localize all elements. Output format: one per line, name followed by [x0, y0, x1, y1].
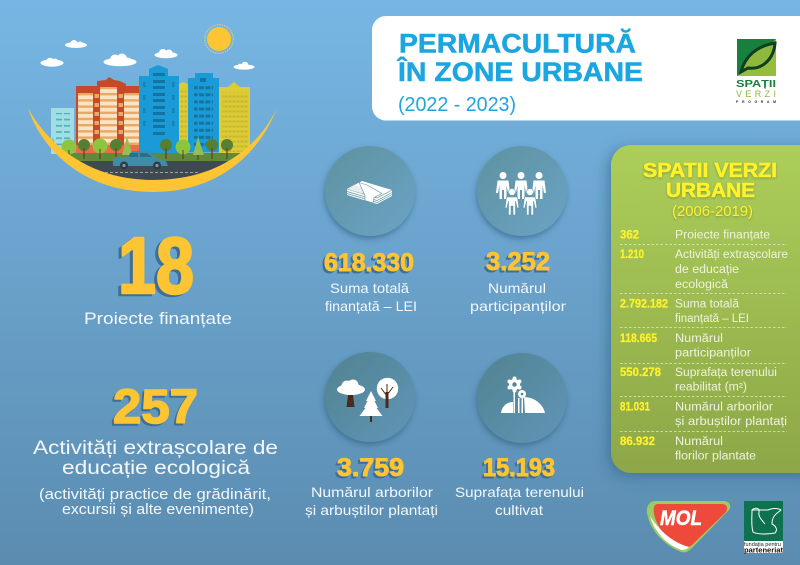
icon: trees	[50, 137, 233, 160]
row: projects: 362	[620, 230, 639, 242]
panel heading: URBANE	[666, 180, 755, 202]
stat: participants: participanților	[470, 298, 566, 314]
stat: total funding: finanțată – LEI	[325, 298, 417, 314]
logo: Spații Verzi: SPAȚII	[736, 78, 776, 90]
stat: trees planted: Numărul arborilor	[311, 484, 433, 500]
stat: cultivated area: Suprafața terenului	[455, 484, 584, 500]
row: activities: ecologică	[675, 279, 729, 291]
row: rehabilitated area	[620, 367, 777, 394]
icon: money	[347, 181, 392, 204]
logo: Fundația pentru Parteneriat: fundația pentru	[744, 542, 781, 548]
stat: projects: 18	[118, 221, 194, 310]
header panel	[372, 16, 800, 120]
building: light blue	[51, 108, 74, 154]
crescent	[28, 108, 277, 192]
logo: MOL: MOL	[660, 507, 702, 530]
panel heading: SPATII VERZI	[643, 160, 777, 182]
stat: activities: Activități extrașcolare de	[33, 437, 278, 459]
stat: activities: educație ecologică	[62, 457, 250, 479]
logo: Spații Verzi: PROGRAM	[736, 100, 776, 104]
row: rehabilitated area: reabilitat (m²)	[675, 382, 747, 394]
stat: total funding: 618.330	[324, 249, 414, 277]
row: funding: Suma totală	[675, 298, 740, 310]
row: participants: 118.665	[620, 333, 658, 345]
logo: Fundația pentru Parteneriat: parteneriat	[744, 546, 784, 554]
logo: Fundația pentru Parteneriat	[744, 501, 784, 554]
logo: Spații Verzi: VERZI	[736, 89, 776, 99]
row: flowers	[620, 436, 756, 462]
stat: participants: Numărul	[488, 280, 546, 296]
row: activities: 1.210	[620, 249, 644, 261]
illustration: city in crescent	[28, 25, 277, 192]
stat: trees planted: și arbuștilor plantați	[305, 502, 438, 518]
stat: activities	[33, 381, 278, 518]
row: funding	[620, 298, 749, 325]
building: yellow	[219, 82, 250, 153]
stat: trees planted: 3.759	[337, 454, 404, 482]
icon: sun	[205, 25, 233, 53]
row: rehabilitated area: Suprafața terenului	[675, 367, 777, 379]
stat: cultivated area: cultivat	[495, 502, 543, 518]
stat: participants	[470, 146, 567, 314]
building: blue tower right	[179, 73, 219, 152]
stat: total funding	[324, 146, 417, 314]
stat: participants: 3.252	[486, 248, 550, 276]
row: activities: de educație	[675, 264, 739, 276]
row: funding: finanțată – LEI	[675, 313, 749, 325]
logo: MOL	[647, 501, 730, 552]
subtitle: (2022 - 2023)	[398, 94, 516, 116]
row: flowers: florilor plantate	[675, 450, 756, 462]
stat: projects: Proiecte finanțate	[84, 309, 232, 328]
panel: Spatii Verzi Urbane	[611, 145, 800, 473]
row: trees: 81.031	[620, 402, 651, 414]
row: trees: Numărul arborilor	[675, 402, 773, 414]
stat: activities: 257	[113, 381, 198, 434]
row: trees: și arbuștilor plantați	[675, 416, 787, 428]
icon: flowers	[501, 376, 545, 413]
logo: Spații Verzi	[736, 39, 776, 104]
row: trees	[620, 402, 787, 428]
stat: activities: excursii și alte evenimente)	[62, 501, 254, 518]
stat: projects	[84, 221, 232, 328]
icon: trees	[337, 378, 398, 422]
building: blue tower centre	[139, 65, 179, 155]
title: ÎN ZONE URBANE	[396, 56, 643, 87]
icon: car	[113, 151, 168, 170]
row: projects	[620, 230, 770, 242]
title: PERMACULTURĂ	[399, 28, 636, 58]
road	[72, 161, 240, 181]
row: participants: participanților	[675, 348, 751, 360]
icon: clouds	[40, 40, 254, 70]
row: projects: Proiecte finanțate	[675, 230, 770, 242]
panel heading	[643, 160, 777, 220]
title	[396, 28, 643, 87]
stat: activities: (activități practice de grădinărit,	[39, 486, 271, 503]
panel heading: (2006-2019)	[672, 203, 753, 220]
row: activities: Activități extrașcolare	[675, 249, 788, 261]
row: activities	[620, 249, 788, 291]
row: participants	[620, 333, 751, 360]
ground	[62, 153, 247, 161]
row: rehabilitated area: 550.278	[620, 367, 662, 379]
stat: trees planted	[305, 352, 438, 518]
stat: total funding: Suma totală	[330, 280, 409, 296]
stat: cultivated area: 15.193	[483, 454, 555, 482]
row: funding: 2.792.182	[620, 298, 668, 310]
row: participants: Numărul	[675, 333, 723, 345]
icon: people	[496, 172, 546, 215]
stat: cultivated area	[455, 353, 584, 518]
row: flowers: Numărul	[675, 436, 723, 448]
building: red	[76, 77, 139, 154]
row: flowers: 86.932	[620, 436, 655, 448]
